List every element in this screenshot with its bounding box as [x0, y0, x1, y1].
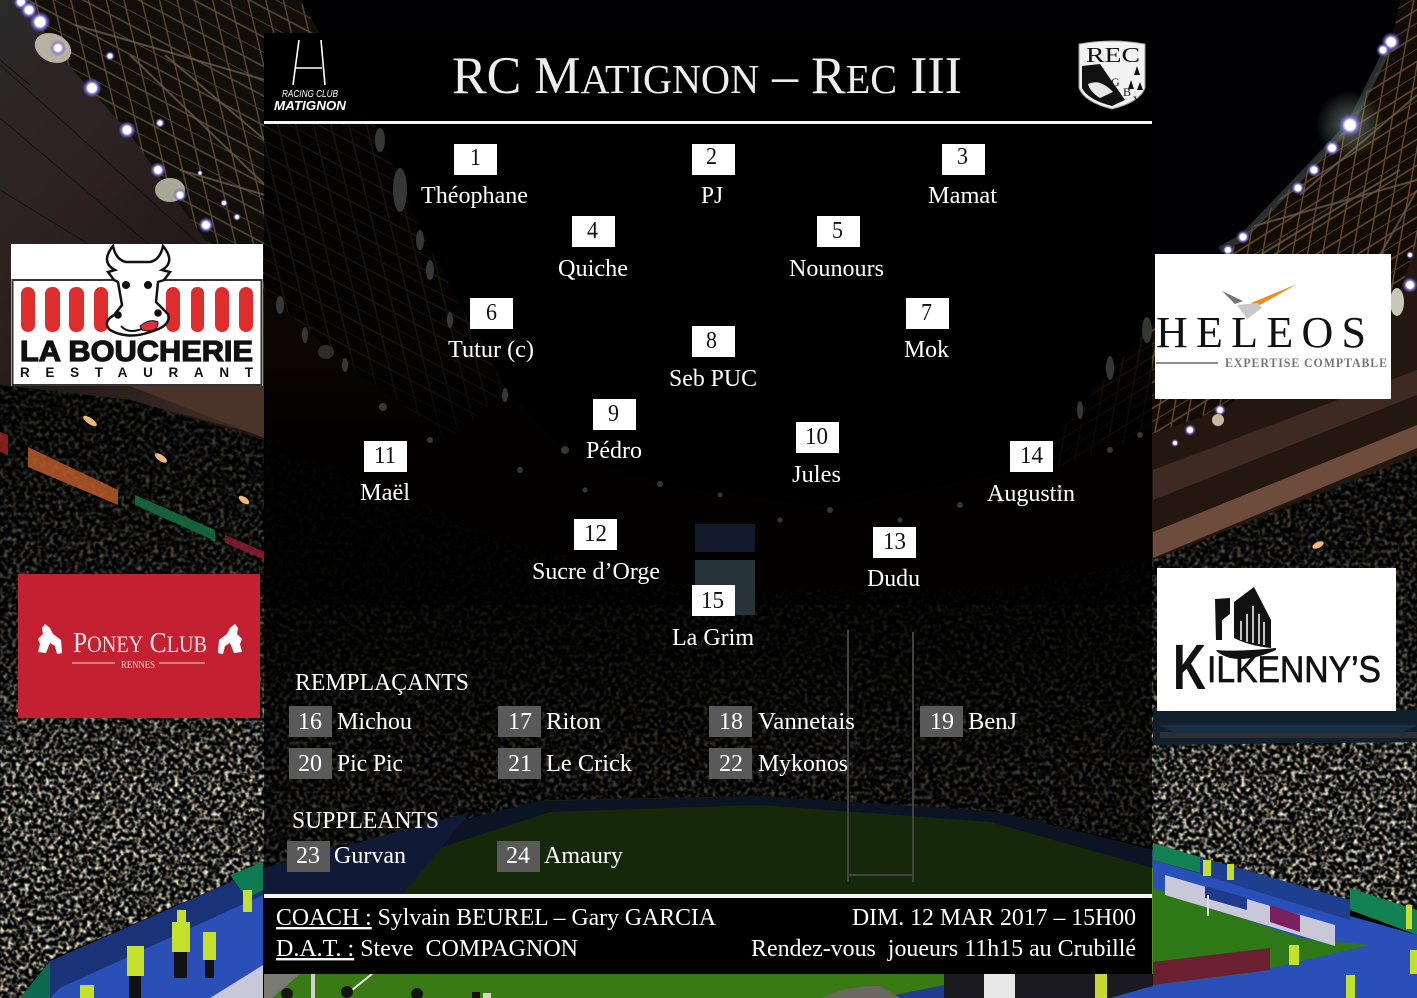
player 3	[928, 144, 997, 209]
sub 18	[709, 706, 855, 737]
player 4: Quiche	[558, 256, 628, 282]
sub 16	[289, 706, 412, 737]
icon: riders	[38, 624, 242, 654]
player 1	[421, 144, 528, 209]
player 8	[669, 326, 757, 392]
sponsor logo: Kilkenny's: K	[1173, 631, 1206, 703]
stewards left	[80, 890, 252, 998]
reserve 24: 24	[506, 843, 530, 869]
scoreboard	[695, 524, 755, 615]
sponsor logo: Heleos: EXPERTISE COMPTABLE	[1225, 355, 1388, 370]
player 5	[789, 216, 884, 282]
ceiling	[0, 0, 1417, 600]
sub 17	[498, 706, 601, 737]
player 12	[532, 519, 660, 585]
player 9	[586, 399, 642, 464]
logo: REC Rugby shield: B	[1123, 85, 1131, 99]
player 13: Dudu	[867, 566, 920, 592]
player 3: 3	[957, 144, 968, 170]
player 10: 10	[805, 424, 828, 450]
footer band: staff and match info	[264, 894, 1152, 974]
coach: COACH : Sylvain BEUREL – Gary GARCIA	[276, 905, 717, 931]
player 14: Augustin	[987, 481, 1075, 507]
bright roof lights left	[13, 0, 241, 233]
inner ring lights seen through panel	[276, 128, 1152, 522]
player 2	[692, 144, 735, 209]
logo: Racing Club Matignon: RACING CLUB	[282, 89, 338, 100]
match date: DIM. 12 MAR 2017 – 15H00	[852, 905, 1136, 931]
player 2: 2	[706, 144, 717, 170]
sub 16: Michou	[337, 709, 412, 735]
stewards right	[1203, 860, 1417, 998]
player 14	[987, 441, 1075, 507]
roof trusses left	[25, 0, 507, 440]
sub 19: BenJ	[968, 709, 1017, 735]
player 1: 1	[470, 145, 481, 171]
icon: castle	[1215, 587, 1276, 659]
player 3: Mamat	[928, 183, 997, 209]
player 15: La Grim	[672, 625, 754, 651]
logo: REC Rugby shield: G	[1111, 75, 1120, 89]
icon: cow head	[107, 246, 170, 336]
player 1: Théophane	[421, 183, 528, 209]
player 4: 4	[587, 218, 598, 244]
sponsor logo: La Boucherie: LA BOUCHERIE	[20, 336, 253, 368]
sponsor logo: Poney Club: RENNES	[121, 660, 155, 671]
stand advertising bands	[0, 432, 265, 560]
night sky	[300, 0, 1400, 507]
sub 19: 19	[930, 709, 954, 735]
d.a.t.: D.A.T. : Steve COMPAGNON	[276, 936, 578, 962]
heading: remplaçants: REMPLAÇANTS	[295, 670, 469, 696]
player 8: Seb PUC	[669, 366, 757, 392]
player 11	[360, 441, 410, 506]
sub 18: Vannetais	[758, 709, 855, 735]
sponsor logo: Kilkenny's	[1157, 568, 1396, 711]
reserve 24: Amaury	[544, 843, 623, 869]
player 12: Sucre d’Orge	[532, 559, 660, 585]
player 6	[448, 298, 534, 363]
player 8: 8	[706, 328, 717, 354]
goal posts	[848, 630, 913, 882]
logo: REC Rugby shield	[1079, 41, 1145, 109]
player 7	[904, 298, 949, 363]
sponsor logo: Kilkenny's: ILKENNY’S	[1207, 649, 1381, 690]
player 15: 15	[701, 588, 724, 614]
player 13: 13	[883, 529, 906, 555]
sponsor logo: La Boucherie: RESTAURANT	[20, 365, 254, 380]
sponsor logo: Heleos: HELEOS	[1156, 308, 1366, 357]
sub 18: 18	[719, 709, 743, 735]
player 11: Maël	[360, 480, 410, 506]
panel: team sheet translucent overlay	[264, 124, 1152, 894]
roof trusses right	[1028, 0, 1417, 470]
sponsor logo: Poney Club	[18, 574, 260, 718]
sub 22: 22	[719, 751, 743, 777]
player 5: Nounours	[789, 256, 884, 282]
sub 17: Riton	[546, 709, 601, 735]
player 9: Pédro	[586, 438, 642, 464]
player 2: PJ	[701, 183, 723, 209]
player 10	[792, 422, 841, 488]
player 13	[867, 527, 920, 592]
logo: REC Rugby shield: U	[1096, 65, 1105, 79]
player 9: 9	[608, 401, 619, 427]
sub 20: Pic Pic	[337, 751, 403, 777]
dim the ceiling behind the panel	[264, 340, 1152, 605]
ceiling spotlights in stands	[82, 414, 1325, 550]
logo: REC Rugby shield: REC	[1086, 43, 1140, 67]
reserve 24	[497, 841, 623, 872]
reserve 23: 23	[296, 843, 320, 869]
header band	[264, 33, 1152, 124]
player 6: Tutur (c)	[448, 337, 534, 363]
player 7: Mok	[904, 337, 949, 363]
meeting time: Rendez-vous joueurs 11h15 au Crubillé	[751, 936, 1136, 962]
logo: Racing Club Matignon	[274, 40, 347, 113]
player 14: 14	[1020, 443, 1043, 469]
player 15	[672, 585, 754, 651]
player 4	[558, 216, 628, 282]
bright roof lights right	[1171, 32, 1417, 447]
player 12: 12	[584, 521, 607, 547]
player 11: 11	[374, 443, 396, 469]
reserve 23	[287, 841, 406, 872]
sub 17: 17	[508, 709, 532, 735]
sub 16: 16	[298, 709, 322, 735]
icon: wing mark	[1222, 284, 1297, 319]
player 6: 6	[486, 300, 497, 326]
heading: suppleants: SUPPLEANTS	[292, 808, 439, 834]
title: RC MATIGNON – REC III	[452, 47, 962, 105]
sponsor logo: La Boucherie	[11, 244, 263, 386]
logo: Racing Club Matignon: MATIGNON	[274, 98, 347, 113]
sub 21: 21	[508, 751, 532, 777]
sub 21	[498, 748, 632, 779]
reserve 23: Gurvan	[334, 843, 406, 869]
sub 19	[920, 706, 1017, 737]
sub 20	[289, 748, 403, 779]
player 10: Jules	[792, 462, 841, 488]
sub 22	[709, 748, 848, 779]
sponsor logo: Poney Club: PONEY CLUB	[73, 627, 207, 659]
pitch and carpet	[20, 796, 1417, 998]
stands to pitch right side	[1153, 860, 1417, 998]
sponsor logo: Heleos	[1155, 254, 1391, 399]
sub 20: 20	[298, 751, 322, 777]
sub 21: Le Crick	[546, 751, 632, 777]
sub 22: Mykonos	[758, 751, 848, 777]
player 7: 7	[921, 300, 932, 326]
logo: REC Rugby shield: Y	[1133, 93, 1142, 107]
player 5: 5	[832, 218, 843, 244]
